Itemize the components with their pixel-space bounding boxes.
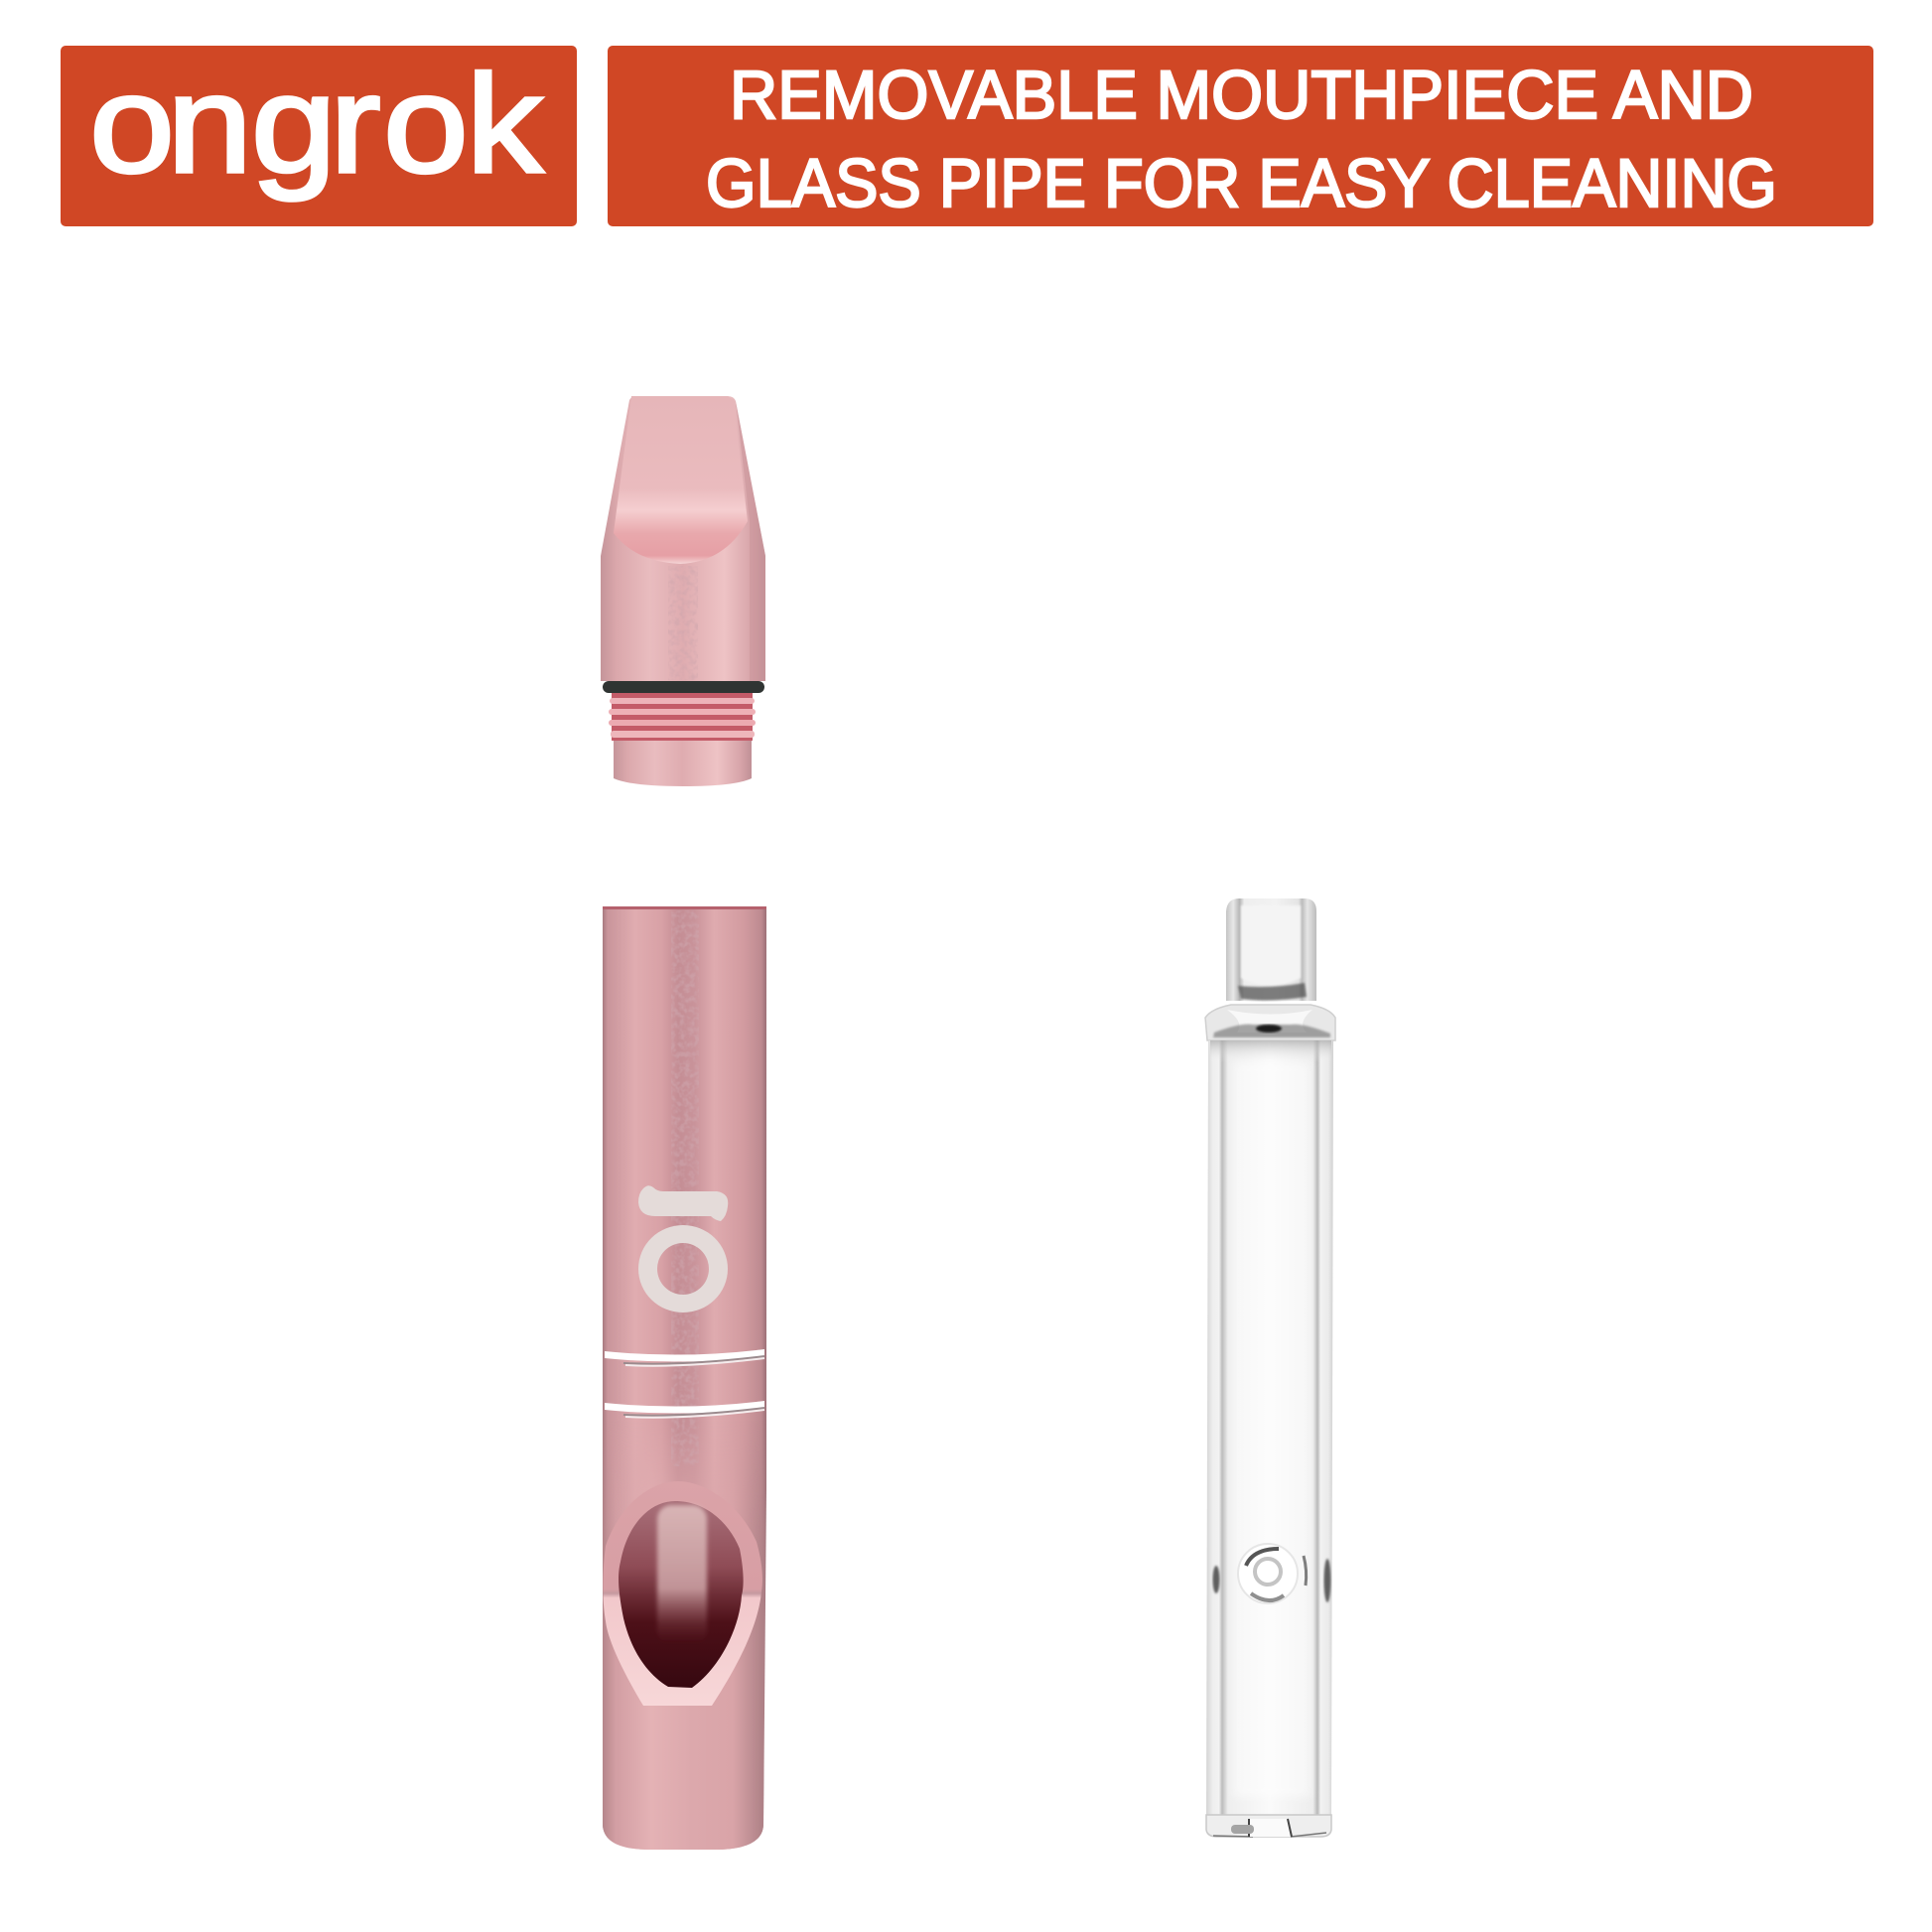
mouthpiece o-ring — [603, 681, 764, 693]
mouthpiece flat scoop — [614, 396, 748, 564]
glass neck inner chamber — [1241, 905, 1301, 985]
ring 1 shadow — [623, 1356, 764, 1364]
foot notch — [1248, 1819, 1291, 1837]
panel: headline banner — [608, 46, 1873, 226]
engraved o logo mark — [638, 1185, 728, 1312]
flange neck highlight — [1227, 1010, 1312, 1033]
silver ring 1 — [605, 1349, 764, 1362]
glass foot — [1206, 1815, 1331, 1837]
foot bubbles — [1231, 1825, 1254, 1834]
air hole upper arc — [1246, 1549, 1279, 1566]
mouthpiece threads — [609, 693, 756, 741]
logo ring — [638, 1225, 728, 1312]
glass inner floor line — [1222, 1808, 1320, 1810]
right side dimple — [1324, 1559, 1330, 1602]
silver ring 2 — [605, 1401, 764, 1414]
mouthpiece collar — [614, 740, 752, 786]
product: clear glass pipe — [1205, 898, 1335, 1837]
product: pink tube with finger hole — [603, 906, 766, 1850]
glass body top shadow — [1210, 1040, 1331, 1062]
logo bar — [638, 1185, 728, 1221]
air hole right arc — [1304, 1556, 1307, 1586]
foot notch dark edge — [1249, 1819, 1292, 1837]
ring 1 lower band — [625, 1358, 764, 1366]
flange dark spot — [1256, 1025, 1282, 1033]
tube centre grain texture — [671, 910, 699, 1466]
tube bottom section — [603, 1464, 764, 1850]
left side dimple — [1213, 1566, 1219, 1593]
ring 2 shadow — [623, 1408, 764, 1416]
finger hole opening — [619, 1501, 744, 1688]
flange dark band — [1213, 1025, 1330, 1037]
tube top rim — [603, 906, 766, 909]
glass neck — [1226, 898, 1316, 1001]
glass flange — [1205, 1005, 1335, 1040]
panel: ongrok logo banner — [61, 46, 577, 226]
glass centre highlight — [1233, 1062, 1311, 1797]
mouthpiece side shading — [736, 401, 765, 681]
air hole lower arc — [1251, 1593, 1284, 1600]
glass main body — [1206, 1040, 1333, 1823]
finger hole inner reflection — [657, 1505, 707, 1644]
logo wordmark: ongrok: ongrok — [89, 47, 543, 202]
finger hole bevel — [603, 1481, 762, 1706]
headline line 1: REMOVABLE MOUTHPIECE AND — [730, 57, 1753, 133]
ring 2 lower band — [625, 1410, 764, 1418]
tube body — [603, 906, 766, 1850]
headline line 2: GLASS PIPE FOR EASY CLEANING — [706, 145, 1777, 221]
mouthpiece centre texture — [668, 566, 698, 680]
glass neck dark ring — [1238, 983, 1307, 1001]
product: removable pink mouthpiece — [601, 396, 765, 786]
mouthpiece body — [601, 396, 765, 681]
air hole ring — [1255, 1559, 1281, 1585]
foot bottom edge — [1213, 1833, 1326, 1837]
air hole halo — [1238, 1544, 1298, 1603]
